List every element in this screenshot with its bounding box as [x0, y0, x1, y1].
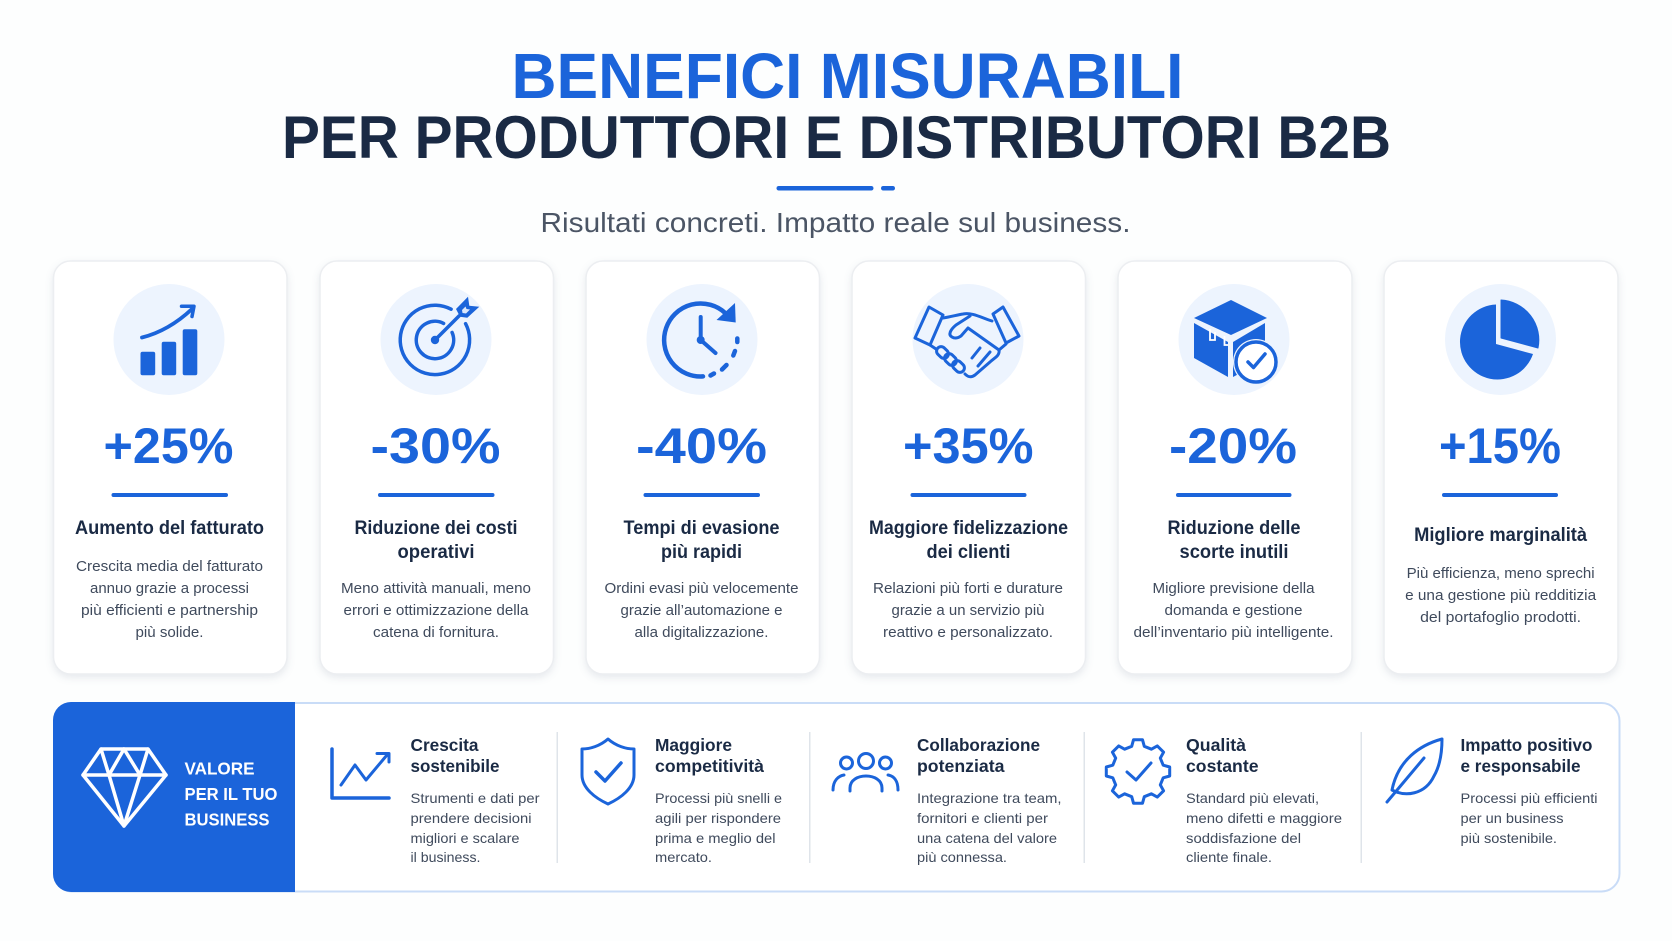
item text: Integrazione tra team, [917, 790, 1062, 806]
item text: più sostenibile. [1460, 830, 1557, 846]
panel: valore per il tuo business [53, 702, 1620, 892]
stat: +15% [1439, 418, 1561, 474]
description [341, 580, 531, 641]
description: catena di fornitura. [373, 624, 499, 641]
item text: costante [1186, 756, 1259, 776]
title [282, 40, 1391, 171]
item text [917, 735, 1062, 865]
panel: aumento del fatturato [54, 261, 287, 674]
item text [410, 735, 540, 865]
description: Crescita media del fatturato [76, 558, 263, 575]
item text [1460, 735, 1598, 846]
heading: Riduzione dei costi [354, 518, 518, 539]
heading: Tempi di evasione [624, 518, 780, 539]
description [604, 580, 798, 641]
title: BENEFICI MISURABILI [512, 40, 1184, 112]
description: Ordini evasi più velocemente [604, 580, 798, 597]
item text: migliori e scalare [410, 830, 520, 846]
icon: gear with check [1106, 740, 1170, 803]
panel: riduzione dei costi operativi [320, 261, 554, 674]
description: e una gestione più redditizia [1405, 587, 1597, 604]
panel: riduzione delle scorte inutili [1118, 261, 1352, 674]
item text: potenziata [917, 756, 1005, 776]
item text: Maggiore [655, 735, 732, 755]
panel: tempi di evasione più rapidi [586, 261, 820, 674]
description [76, 558, 263, 641]
title accent rule [776, 186, 895, 190]
item text: Collaborazione [917, 735, 1040, 755]
description: dell’inventario più intelligente. [1134, 624, 1334, 641]
stat: -40% [636, 418, 767, 474]
item text: Qualità [1186, 735, 1246, 755]
item text: meno difetti e maggiore [1186, 810, 1342, 826]
item text: Impatto positivo [1460, 735, 1592, 755]
item text [1186, 735, 1342, 865]
heading [624, 518, 780, 563]
item text: e responsabile [1460, 756, 1581, 776]
item text: cliente finale. [1186, 849, 1272, 865]
item text: competitività [655, 756, 764, 776]
description: Migliore previsione della [1152, 580, 1315, 597]
item: crescita sostenibile [332, 735, 540, 865]
item text: Processi più snelli e [655, 790, 782, 806]
label text [184, 758, 278, 830]
label text: BUSINESS [184, 810, 270, 830]
item text: il business. [410, 849, 480, 865]
item text: Strumenti e dati per [410, 790, 540, 806]
icon: box with check [1194, 300, 1279, 385]
item: qualità costante [1106, 735, 1342, 865]
heading: Maggiore fidelizzazione [869, 518, 1068, 539]
stat: -30% [370, 418, 500, 474]
description: Meno attività manuali, meno [341, 580, 531, 597]
heading: Aumento del fatturato [75, 518, 264, 539]
icon: pie chart [1460, 300, 1539, 379]
item: collaborazione potenziata [833, 735, 1062, 865]
description [1405, 565, 1597, 626]
item text: Processi più efficienti [1460, 790, 1598, 806]
heading: scorte inutili [1180, 542, 1288, 563]
icon: handshake [915, 307, 1019, 377]
blue label block [53, 702, 295, 892]
heading: dei clienti [926, 542, 1010, 563]
heading: Riduzione delle [1168, 518, 1300, 539]
icon: leaf [1387, 739, 1442, 802]
heading [869, 518, 1068, 563]
icon: clock with arrow [664, 303, 737, 376]
item text: per un business [1460, 810, 1564, 826]
item text: fornitori e clienti per [917, 810, 1048, 826]
description: alla digitalizzazione. [634, 624, 768, 641]
description: grazie all’automazione e [620, 602, 782, 619]
description: Più efficienza, meno sprechi [1407, 565, 1595, 582]
title: PER PRODUTTORI E DISTRIBUTORI B2B [282, 104, 1391, 171]
item text: agili per rispondere [655, 810, 781, 826]
subtitle: Risultati concreti. Impatto reale sul business. [540, 207, 1130, 238]
icon: bar chart with arrow [140, 306, 197, 375]
item text: Crescita [410, 735, 479, 755]
heading: Migliore marginalità [1414, 525, 1588, 546]
panel: migliore marginalità [1384, 261, 1618, 674]
description: errori e ottimizzazione della [344, 602, 529, 619]
item text: Standard più elevati, [1186, 790, 1319, 806]
description: più efficienti e partnership [81, 602, 258, 619]
icon: target with arrow [400, 297, 479, 375]
description: Relazioni più forti e durature [873, 580, 1063, 597]
item text: più connessa. [917, 849, 1007, 865]
label text: VALORE [184, 758, 254, 778]
item text: mercato. [655, 849, 712, 865]
description: del portafoglio prodotti. [1420, 609, 1581, 626]
heading [1168, 518, 1300, 563]
icon: line chart [332, 749, 389, 798]
heading: più rapidi [661, 542, 742, 563]
item text: prendere decisioni [410, 810, 532, 826]
description: domanda e gestione [1164, 602, 1302, 619]
item: impatto positivo e responsabile [1387, 735, 1598, 846]
stat: +25% [104, 418, 234, 474]
heading [354, 518, 518, 563]
description: reattivo e personalizzato. [883, 624, 1053, 641]
description: più solide. [136, 624, 204, 641]
item text: sostenibile [410, 756, 500, 776]
heading: operativi [398, 542, 474, 563]
description: annuo grazie a processi [90, 580, 249, 597]
item: maggiore competitività [582, 735, 782, 865]
icon: people [833, 754, 898, 791]
label text: PER IL TUO [184, 784, 278, 804]
stat: +35% [903, 418, 1034, 474]
item text: soddisfazione del [1186, 830, 1301, 846]
description: grazie a un servizio più [892, 602, 1044, 619]
description [873, 580, 1063, 641]
item text [655, 735, 782, 865]
item text: prima e meglio del [655, 830, 776, 846]
panel: maggiore fidelizzazione dei clienti [852, 261, 1086, 674]
icon: shield with check [582, 739, 634, 804]
stat: -20% [1169, 418, 1297, 474]
icon: diamond [83, 749, 166, 826]
item text: una catena del valore [917, 830, 1057, 846]
description [1134, 580, 1334, 641]
